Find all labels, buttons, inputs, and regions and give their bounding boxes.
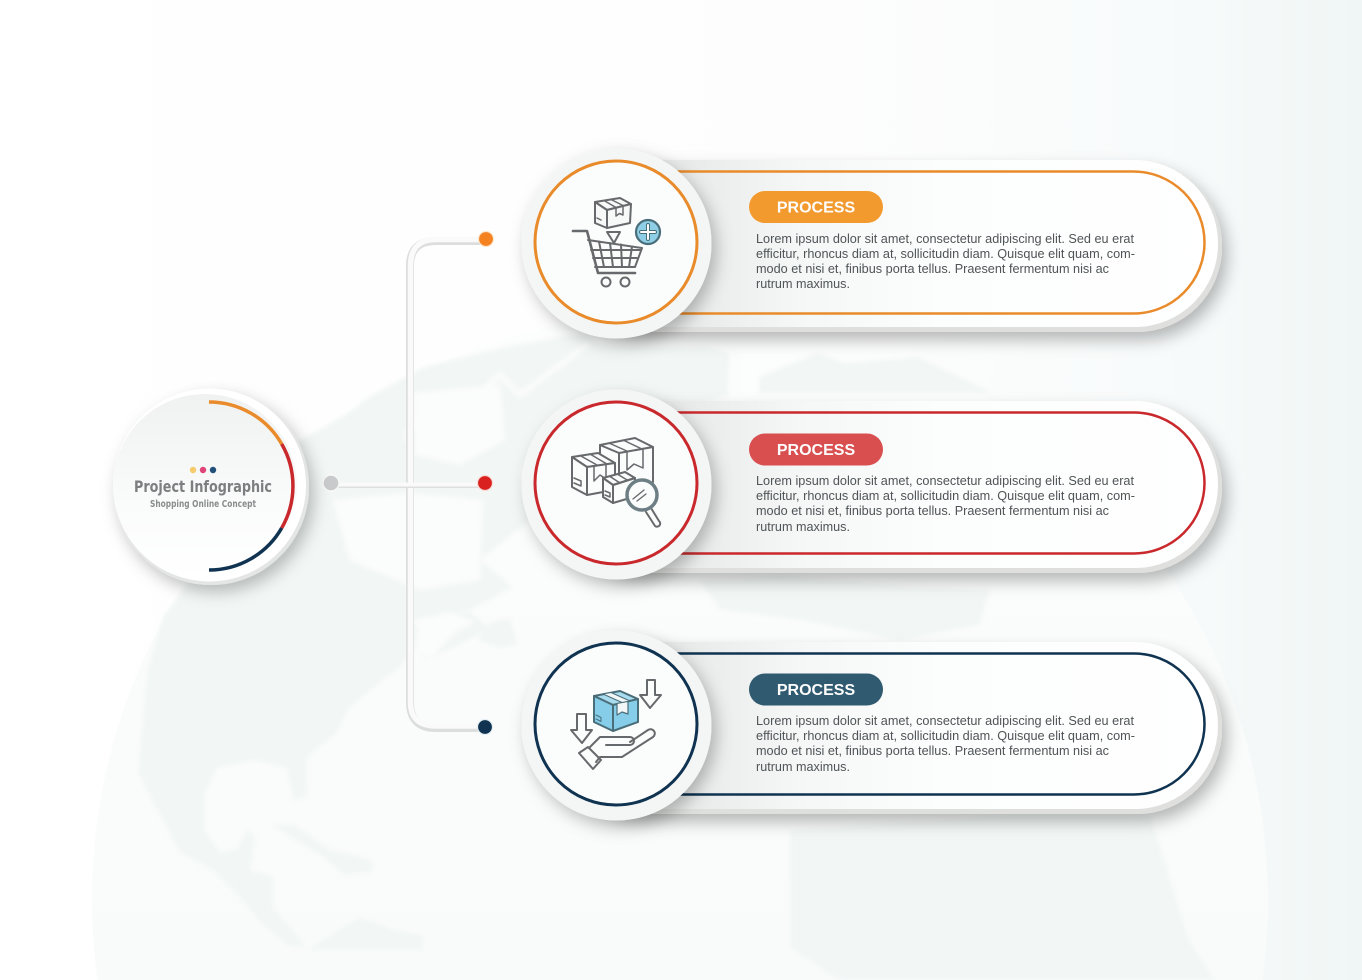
body text [756, 232, 1135, 291]
body text: rutrum maximus. [756, 760, 850, 774]
body text: efficitur, rhoncus diam at, sollicitudin diam. Quisque elit quam, com- [756, 489, 1135, 503]
connector dot: navy [478, 720, 492, 734]
connector dot: orange [478, 232, 494, 246]
body text: modo et nisi et, finibus porta tellus. Praesent fermentum nisi ac [756, 504, 1109, 518]
body text [756, 714, 1135, 774]
icon: boxes with magnifier [572, 438, 660, 527]
central title: Project Infographic [134, 477, 272, 496]
icon disc [522, 390, 712, 580]
body text [756, 474, 1135, 534]
outline [560, 654, 1204, 794]
badge: PROCESS [777, 442, 855, 459]
navy arc [209, 528, 282, 570]
body text: rutrum maximus. [756, 277, 850, 291]
three dots [190, 467, 216, 473]
icon disc [522, 148, 712, 338]
connector dot: red [478, 476, 492, 490]
body text: rutrum maximus. [756, 520, 850, 534]
red arc [282, 444, 293, 528]
badge [749, 191, 883, 223]
body text: efficitur, rhoncus diam at, sollicitudin diam. Quisque elit quam, com- [756, 729, 1135, 743]
outline [560, 412, 1204, 554]
panel: process 1 [522, 148, 1222, 338]
badge [749, 674, 883, 706]
orange arc [209, 402, 282, 444]
body text: modo et nisi et, finibus porta tellus. Praesent fermentum nisi ac [756, 262, 1109, 276]
connector lines [331, 240, 485, 728]
badge: PROCESS [777, 200, 855, 216]
body text: Lorem ipsum dolor sit amet, consectetur adipiscing elit. Sed eu erat [756, 232, 1135, 246]
outline [560, 172, 1204, 314]
badge [749, 434, 883, 466]
panel: central circle [113, 388, 309, 585]
badge: PROCESS [777, 682, 855, 699]
icon: shopping cart with box [573, 198, 660, 286]
central subtitle: Shopping Online Concept [150, 499, 256, 510]
world map globe [92, 312, 1268, 980]
icon disc [522, 630, 712, 820]
body text: Lorem ipsum dolor sit amet, consectetur adipiscing elit. Sed eu erat [756, 474, 1135, 488]
icon: box over hand with arrows [571, 680, 661, 769]
panel: process 3 [522, 630, 1222, 820]
body text: efficitur, rhoncus diam at, sollicitudin diam. Quisque elit quam, com- [756, 247, 1135, 261]
panel: process 2 [522, 390, 1222, 580]
body text: Lorem ipsum dolor sit amet, consectetur adipiscing elit. Sed eu erat [756, 714, 1135, 728]
body text: modo et nisi et, finibus porta tellus. Praesent fermentum nisi ac [756, 744, 1109, 758]
connector dot: source [323, 475, 339, 491]
